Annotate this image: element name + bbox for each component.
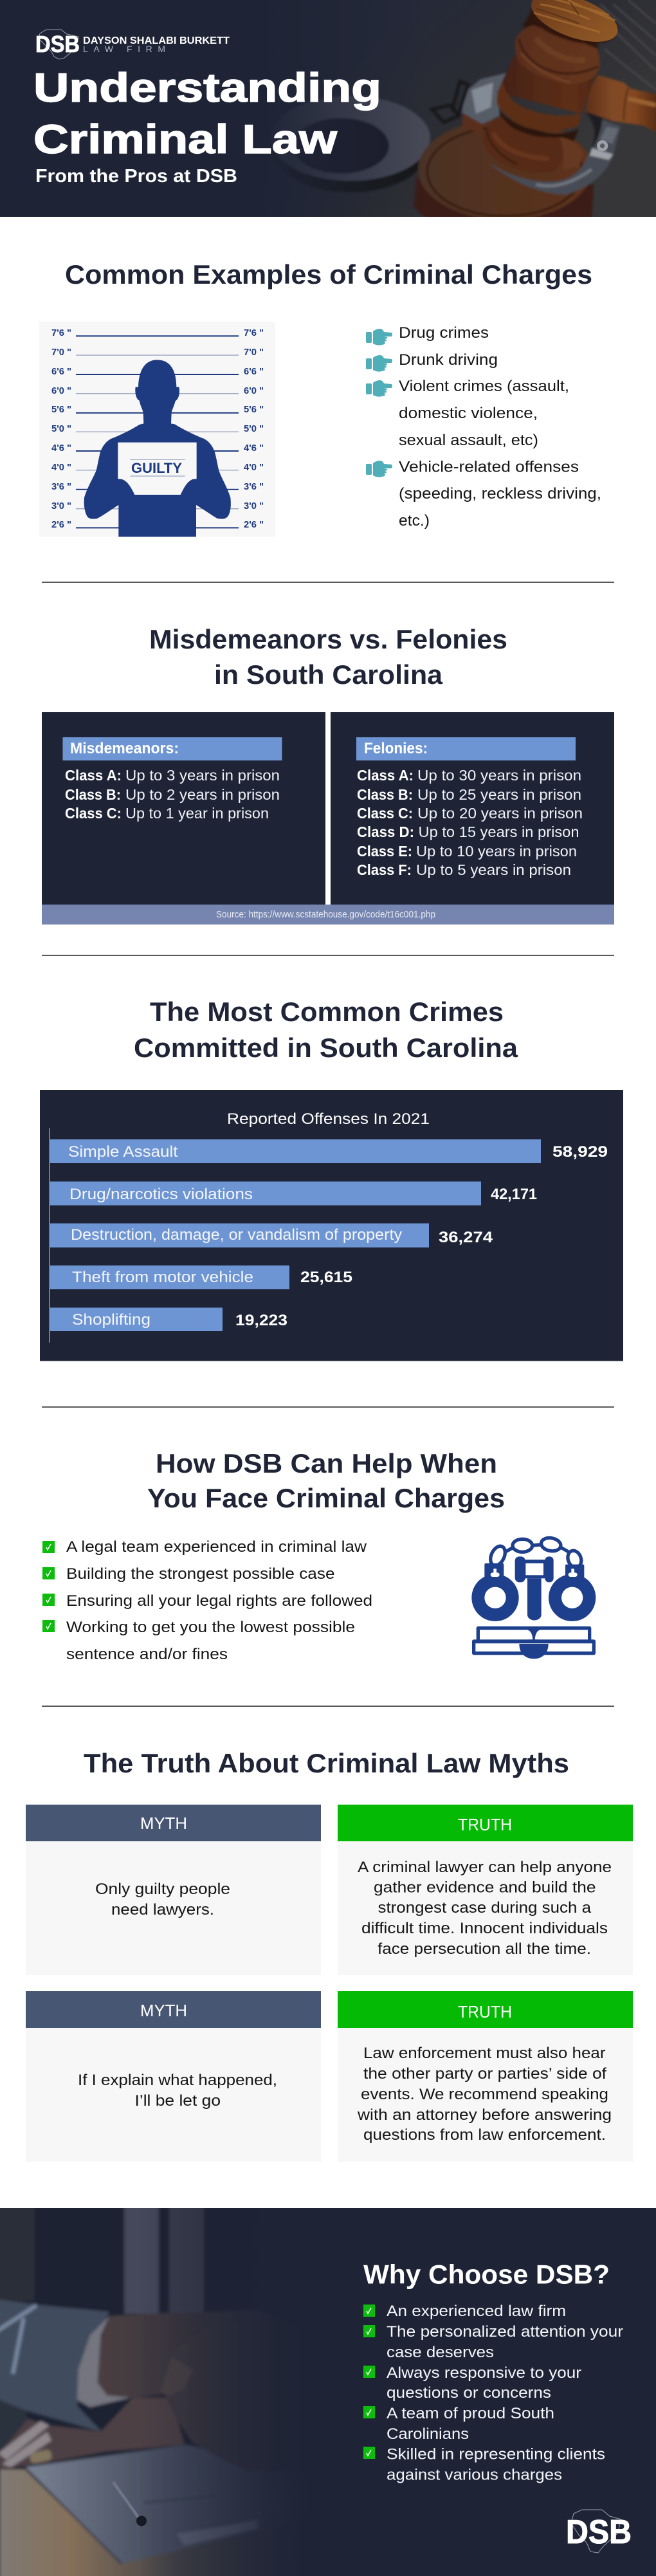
subtitle: From the Pros at DSB [35, 166, 237, 187]
panel: misdemeanors: Misdemeanors: [70, 740, 179, 757]
card: myth 2: If I explain what happened, [78, 2072, 277, 2089]
list: examples of charges: Drunk driving [399, 351, 498, 369]
bar: destruction of property [50, 1224, 493, 1247]
bar: theft from motor vehicle: 25,615 [300, 1269, 352, 1286]
list: examples of charges: domestic violence, [399, 405, 538, 422]
checklist [363, 2303, 623, 2483]
list: examples of charges: Drug crimes [399, 324, 489, 342]
card: truth 1: gather evidence and build the [374, 1879, 596, 1897]
checklist: Skilled in representing clients [387, 2446, 605, 2463]
panel: felonies: Up to 20 years in prison [417, 805, 583, 822]
section: misdemeanors vs felonies [42, 624, 614, 925]
checklist: case deserves [387, 2344, 494, 2361]
mugshot illustration: 4'6 " [244, 443, 264, 454]
table grain, cuff ring and gavel [270, 0, 656, 221]
panel: misdemeanors: Class B: [65, 786, 121, 803]
source bar: Source: https://www.scstatehouse.gov/code/t16c001.php [216, 909, 435, 920]
card: truth 1: difficult time. Innocent individuals [361, 1920, 608, 1937]
icon: handcuffs, gavel and book [471, 1536, 596, 1659]
icon: pointing hand [366, 380, 392, 397]
card: truth 1: TRUTH [458, 1815, 512, 1834]
checklist: questions or concerns [387, 2384, 551, 2402]
mugshot illustration: 3'6 " [51, 482, 71, 492]
mugshot illustration: 4'0 " [51, 463, 71, 473]
card: myth 2: I’ll be let go [135, 2092, 221, 2110]
logo: DSB Dayson Shalabi Burkett Law Firm: LAW FIRM [83, 44, 165, 54]
panel: felonies: Class B: [357, 786, 413, 803]
footer photo: handshake over paperwork [0, 2200, 656, 2576]
panel: misdemeanors: Up to 2 years in prison [125, 786, 280, 803]
mugshot illustration: 2'6 " [244, 520, 264, 530]
heading [147, 1448, 505, 1513]
pen on paperwork [113, 2482, 147, 2526]
panel: felonies [331, 712, 614, 905]
heading: Common Examples of Criminal Charges [65, 259, 592, 290]
panel: misdemeanors [42, 712, 325, 905]
footer panel: why choose DSB [0, 2200, 656, 2576]
heading [134, 997, 518, 1063]
card: truth 2: events. We recommend speaking [361, 2086, 608, 2103]
heading: The Truth About Criminal Law Myths [84, 1748, 569, 1778]
card: truth 2: with an attorney before answering [357, 2106, 612, 2124]
panel: misdemeanors: Class C: [65, 805, 122, 822]
mugshot illustration: 6'0 " [51, 386, 71, 396]
checklist: against various charges [387, 2467, 562, 2483]
mugshot illustration: 3'0 " [51, 501, 71, 511]
icon: check [363, 2406, 375, 2418]
mugshot illustration: 6'6 " [51, 367, 71, 377]
icon: check [363, 2447, 375, 2459]
card: truth 2: TRUTH [458, 2002, 512, 2021]
heading: The Most Common Crimes [150, 997, 504, 1027]
silhouette holding sign [84, 360, 231, 537]
bar: drug violations: 42,171 [491, 1186, 537, 1203]
panel: misdemeanors: Up to 1 year in prison [125, 805, 269, 822]
card: myth 1: need lawyers. [111, 1901, 214, 1918]
card: truth 1 [338, 1805, 633, 1975]
panel: felonies: Class D: [357, 823, 414, 840]
checklist: sentence and/or fines [66, 1646, 228, 1663]
main title [33, 66, 381, 162]
checklist: Ensuring all your legal rights are followed [66, 1592, 372, 1610]
bar: shoplifting: Shoplifting [72, 1311, 150, 1329]
icon: check [363, 2305, 375, 2317]
icon: pointing hand [366, 329, 392, 345]
icon: check [42, 1594, 55, 1606]
bar: simple assault: 58,929 [552, 1143, 608, 1161]
panel: felonies: Class F: [357, 861, 412, 878]
mugshot illustration: 3'0 " [244, 501, 264, 511]
icon: check [42, 1541, 55, 1553]
bar: theft from motor vehicle [50, 1265, 352, 1289]
mugshot illustration: 2'6 " [51, 520, 71, 530]
mugshot illustration: 7'6 " [51, 328, 71, 338]
panel: felonies: Up to 30 years in prison [417, 767, 581, 784]
icon: check [363, 2366, 375, 2378]
heading: in South Carolina [214, 659, 443, 690]
checklist: An experienced law firm [387, 2303, 566, 2320]
icon: check [42, 1620, 55, 1632]
list: examples of charges: Violent crimes (assault, [399, 378, 569, 395]
panel: misdemeanors: Up to 3 years in prison [125, 767, 280, 784]
bar: simple assault [50, 1139, 608, 1163]
bar chart: reported offenses [40, 1090, 623, 1361]
icon: check [42, 1567, 55, 1579]
icon: pointing hand [366, 461, 392, 477]
heading: Why Choose DSB? [363, 2259, 610, 2289]
mugshot illustration: 4'6 " [51, 443, 71, 454]
main title: Criminal Law [33, 117, 338, 162]
mugshot illustration: GUILTY [131, 460, 182, 476]
card: myth 1: MYTH [140, 1814, 187, 1833]
mugshot illustration: 3'6 " [244, 482, 264, 492]
heading [149, 624, 507, 690]
bar: drug violations [50, 1181, 537, 1206]
section: truth about myths [26, 1748, 633, 2162]
bar: simple assault: Simple Assault [68, 1143, 178, 1161]
bar: destruction of property: Destruction, damage, or vandalism of property [71, 1226, 402, 1244]
bar: theft from motor vehicle: Theft from motor vehicle [72, 1269, 253, 1286]
mugshot illustration [39, 322, 275, 537]
list: examples of charges: sexual assault, etc) [399, 432, 538, 449]
card: truth 2: questions from law enforcement. [363, 2126, 606, 2144]
heading: You Face Criminal Charges [147, 1483, 505, 1513]
mugshot illustration: 5'0 " [51, 424, 71, 434]
logo: DSB Dayson Shalabi Burkett Law Firm: DAYSON SHALABI BURKETT [83, 35, 230, 46]
hero photo: gavel and handcuffs [0, 0, 656, 221]
card: myth 2: MYTH [140, 2001, 187, 2020]
chart title: Reported Offenses In 2021 [227, 1110, 430, 1128]
bar: drug violations: Drug/narcotics violations [69, 1186, 253, 1203]
icon: pointing hand [366, 355, 392, 372]
logo: DSB: DSB [566, 2514, 632, 2551]
logo: DSB Dayson Shalabi Burkett Law Firm [35, 30, 230, 59]
source bar [42, 905, 614, 925]
checklist: The personalized attention your [387, 2323, 623, 2341]
panel: misdemeanors: Class A: [65, 767, 122, 784]
panel: felonies: Class E: [357, 843, 412, 860]
panel: felonies: Up to 15 years in prison [418, 823, 579, 840]
mugshot illustration: 5'6 " [244, 405, 264, 415]
checklist: Always responsive to your [387, 2364, 581, 2382]
heading: How DSB Can Help When [156, 1448, 497, 1478]
checklist: Working to get you the lowest possible [66, 1619, 355, 1636]
card: truth 1: A criminal lawyer can help anyone [358, 1859, 612, 1876]
checklist: A team of proud South [387, 2405, 554, 2422]
panel: felonies: Up to 25 years in prison [417, 786, 581, 803]
card: truth 1: strongest case during such a [378, 1899, 592, 1917]
card: truth 2: Law enforcement must also hear [363, 2045, 606, 2062]
section: common examples of criminal charges [39, 259, 601, 537]
panel: felonies: Up to 5 years in prison [416, 861, 571, 878]
list: examples of charges [366, 324, 601, 529]
card: myth 1: Only guilty people [95, 1881, 230, 1898]
heading: Misdemeanors vs. Felonies [149, 624, 507, 654]
icon: check [363, 2325, 375, 2337]
panel: felonies: Class C: [357, 805, 413, 822]
card: myth 2 [26, 1991, 321, 2162]
card: truth 2 [338, 1991, 633, 2162]
mugshot illustration: 7'0 " [244, 347, 264, 358]
section: how DSB can help [42, 1448, 596, 1663]
main title: Understanding [33, 66, 381, 111]
bar: shoplifting [50, 1307, 287, 1331]
checklist: Carolinians [387, 2425, 469, 2443]
gavel striker face and cuff rivet [525, 0, 624, 151]
logo: DSB Dayson Shalabi Burkett Law Firm: DSB [35, 31, 80, 57]
card: myth 1 [26, 1805, 321, 1975]
bar: shoplifting: 19,223 [235, 1312, 287, 1329]
list: examples of charges: (speeding, reckless driving, [399, 485, 601, 502]
checklist: Building the strongest possible case [66, 1565, 334, 1583]
card: truth 1: face persecution all the time. [378, 1940, 591, 1958]
checklist: A legal team experienced in criminal law [66, 1538, 367, 1556]
mugshot illustration: 6'0 " [244, 386, 264, 396]
panel: felonies: Class A: [357, 767, 414, 784]
bar: destruction of property: 36,274 [439, 1229, 493, 1246]
mugshot illustration: 7'6 " [244, 328, 264, 338]
mugshot illustration: 6'6 " [244, 367, 264, 377]
checklist [42, 1538, 372, 1663]
mugshot illustration: 7'0 " [51, 347, 71, 358]
panel: felonies: Up to 10 years in prison [416, 843, 577, 860]
mugshot illustration: 5'0 " [244, 424, 264, 434]
hero banner [0, 0, 656, 221]
panel: felonies: Felonies: [364, 740, 428, 757]
list: examples of charges: Vehicle-related offenses [399, 458, 579, 476]
card: truth 2: the other party or parties’ side of [363, 2065, 606, 2083]
heading: Committed in South Carolina [134, 1033, 518, 1063]
mugshot illustration: 4'0 " [244, 463, 264, 473]
mugshot illustration: 5'6 " [51, 405, 71, 415]
section: most common crimes [40, 997, 623, 1361]
list: examples of charges: etc.) [399, 512, 430, 529]
